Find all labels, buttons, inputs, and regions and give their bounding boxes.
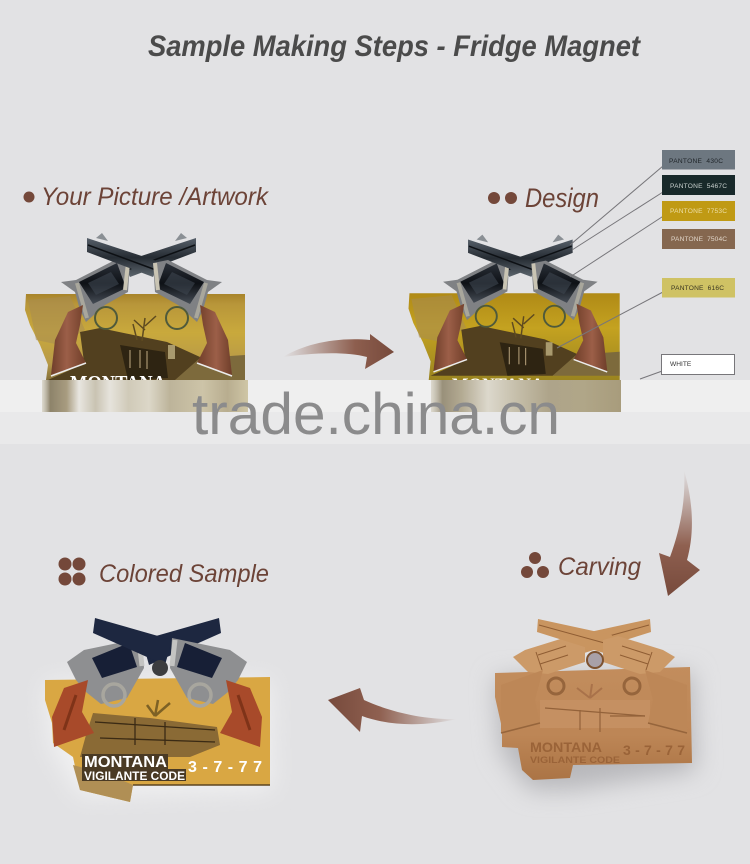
arrow: picture to design xyxy=(283,334,394,369)
panel: design xyxy=(408,150,735,396)
swatch: pantone 7504c: PANTONE 7504C xyxy=(671,236,727,243)
leader lines xyxy=(557,166,665,379)
shadow xyxy=(495,672,696,790)
reflection: design xyxy=(431,380,621,412)
heading: carving: Carving xyxy=(558,553,641,581)
panel: your picture / artwork xyxy=(24,183,269,394)
carved magnet: VIGILANTE CODE xyxy=(530,755,620,765)
swatch: pantone 7753c: PANTONE 7753C xyxy=(670,208,727,215)
artwork: map with revolvers: MONTANA xyxy=(70,372,167,394)
arrow: carving to colored sample xyxy=(328,688,457,732)
colored magnet: VIGILANTE CODE xyxy=(84,771,185,783)
heading: colored sample: Colored Sample xyxy=(99,560,269,588)
swatch: pantone 430c: PANTONE 430C xyxy=(669,158,723,165)
swatch: pantone 5467c xyxy=(662,175,735,195)
colored magnet: MONTANA xyxy=(84,754,167,771)
heading: design: Design xyxy=(525,183,599,213)
icon: two step dots xyxy=(488,192,517,204)
swatch: pantone 430c xyxy=(662,150,735,170)
carved magnet: MONTANA xyxy=(530,740,602,755)
swatch: pantone 616c xyxy=(662,278,735,298)
artwork: design copy: MONTANA xyxy=(452,375,544,396)
swatch: white: WHITE xyxy=(670,361,692,368)
colored magnet: 3-7-77 xyxy=(188,759,262,776)
swatch: pantone 7753c xyxy=(662,201,735,221)
artwork: design copy xyxy=(408,235,620,396)
watermark text: trade.china.cn xyxy=(192,382,560,447)
shadow xyxy=(45,680,272,796)
colored magnet xyxy=(45,618,270,802)
heading: your picture: Your Picture /Artwork xyxy=(41,183,269,211)
panel: carving xyxy=(495,552,696,790)
arrow: design to carving xyxy=(659,470,700,596)
watermark band xyxy=(0,380,750,447)
swatch: pantone 5467c: PANTONE 5467C xyxy=(670,183,727,190)
swatch: white xyxy=(662,354,734,374)
swatch: pantone 616c: PANTONE 616C xyxy=(671,285,724,292)
swatch: pantone 7504c xyxy=(662,229,735,249)
title: Sample Making Steps - Fridge Magnet xyxy=(148,30,641,63)
artwork: map with revolvers xyxy=(25,233,245,394)
icon: one step dot xyxy=(24,192,34,202)
panel: colored sample xyxy=(45,558,272,802)
carved magnet xyxy=(495,619,692,780)
reflection: picture xyxy=(42,380,248,412)
carved magnet: 3-7-77 xyxy=(623,742,685,758)
icon: three step dots xyxy=(521,552,549,578)
icon: four step dots xyxy=(58,558,86,586)
